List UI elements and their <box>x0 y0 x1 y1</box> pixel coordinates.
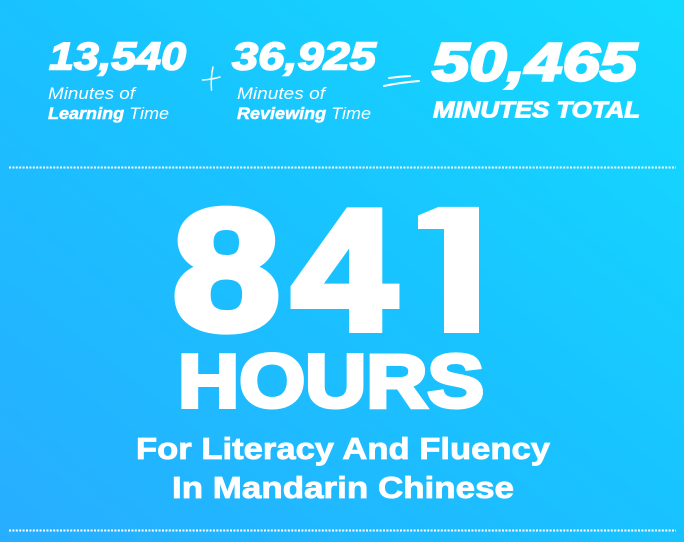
reviewing minutes number: 36,925 <box>232 36 378 78</box>
subtitle: For Literacy And Fluency <box>136 432 550 466</box>
stat: reviewing time <box>232 36 378 123</box>
bottom dotted divider <box>9 530 676 532</box>
headline number: 8 <box>173 175 280 366</box>
learning minutes number: 13,540 <box>49 36 186 78</box>
icon: plus sign <box>202 67 220 90</box>
icon: equals sign <box>384 76 419 86</box>
stat: learning time <box>48 36 186 123</box>
total minutes number: 50,465 <box>432 32 638 92</box>
total minutes label: MINUTES TOTAL <box>433 96 640 122</box>
reviewing minutes label: Reviewing Time <box>237 104 371 123</box>
headline number: 4 <box>292 175 396 366</box>
headline number: 1 <box>377 175 524 366</box>
learning minutes label: Minutes of <box>48 84 138 103</box>
subtitle: In Mandarin Chinese <box>172 471 514 505</box>
top dotted divider <box>9 166 676 168</box>
headline number <box>174 206 479 335</box>
reviewing minutes label <box>237 84 371 123</box>
subtitle <box>136 432 550 505</box>
reviewing minutes label: Minutes of <box>237 84 328 103</box>
learning minutes label <box>48 84 169 123</box>
headline unit: HOURS <box>178 339 484 423</box>
stat: total minutes <box>432 32 640 122</box>
learning minutes label: Learning Time <box>48 104 169 123</box>
